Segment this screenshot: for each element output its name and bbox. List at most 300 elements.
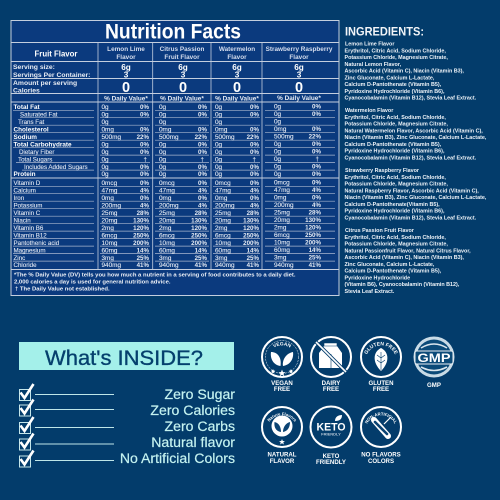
ingredients: lemon lime: Lemon Lime Flavor [345,42,395,48]
banner: What's INSIDE?: What's INSIDE? [45,346,203,370]
ingredients: lemon lime: Erythritol, Citric Acid, Sodium Chloride, [344,48,446,54]
ingredients: lemon lime: Cyanocobalamin (Vitamin B12), Stevia Leaf Extract. [344,96,477,102]
column: strawberry raspberry values: 250% [305,232,321,239]
nutrient labels: Calcium [14,187,36,194]
calories row: 0 [295,80,303,96]
icon: dairy free [311,337,351,393]
column: watermelon values: 0g [215,141,223,148]
serving information: 6g [232,63,242,72]
column: lemon lime values: 0mg [102,195,114,202]
column: lemon lime values: 2mg [102,225,114,232]
column: citrus passion values: 0g [159,111,167,118]
column: strawberry raspberry values: 28% [309,210,321,216]
column: lemon lime values: 0% [140,104,149,111]
ingredients: watermelon: Calcium D-Pantothenate (Vitamin B5), [344,142,442,148]
column: strawberry raspberry values: 10mg [274,240,290,246]
column: watermelon values: 0g [215,156,223,163]
header row: flavors: Fruit Flavor [164,54,200,61]
column: strawberry raspberry values: 0% [312,148,321,156]
column: watermelon values: 0% [250,141,259,148]
daily value headers: % Daily Value* [277,95,321,102]
daily value headers: % Daily Value* [160,96,204,102]
ingredients: lemon lime: Potassium Chloride, Magnesium Citrate, [344,55,448,61]
column: strawberry raspberry values: 0g [274,156,282,163]
nutrient labels: Total Fat [14,104,41,111]
ingredients: strawberry raspberry: Cyanocobalamin (Vitamin B12), Stevia Leaf Extract. [344,215,477,221]
column: citrus passion values: 20mg [159,217,175,224]
column: lemon lime values: 41% [137,262,149,269]
nutrient labels: Zinc [14,255,25,262]
nutrient labels: Saturated Fat [20,111,58,118]
footnote: *The % Daily Value (DV) tells you how much a nutrient in a serving of food contributes to a daily diet. [14,272,296,278]
nutrient labels: Vitamin B6 [14,225,44,232]
column: strawberry raspberry values: 0g [274,164,282,170]
ingredients: watermelon: Natural Watermelon Flavor, Ascorbic Acid (Vitamin C), [344,128,483,134]
column: citrus passion values: 200% [191,240,207,247]
column: watermelon values: 6mcg [215,232,231,239]
column: citrus passion values: 0g [159,164,167,171]
column: strawberry raspberry values: 14% [309,247,321,254]
column: citrus passion values: 0g [159,171,167,178]
nutrient labels: Chloride [14,262,37,269]
column: strawberry raspberry values: 500mg [274,134,294,140]
header row: flavors: Flavor [116,54,136,61]
column: watermelon values: 500mg [215,134,235,141]
footnote [14,272,296,292]
column: lemon lime values: 0% [140,149,149,156]
column: citrus passion values: 47mg [159,187,175,194]
column: lemon lime values: 130% [133,217,149,224]
ingredients: watermelon: Cyanocobalamin (Vitamin B12), Stevia Leaf Extract. [344,155,477,161]
column: strawberry raspberry values: 0% [312,164,321,170]
column: strawberry raspberry values: 20mg [274,217,290,224]
column: watermelon values: 25% [247,255,259,262]
checklist [20,384,235,467]
nutrient labels: Niacin [14,217,31,224]
ingredients: watermelon: Niacin (Vitamin B3), Zinc Gluconate, Calcium L-Lactate, [344,135,487,141]
column: strawberry raspberry values: 940mg [274,262,294,269]
column: strawberry raspberry values: 0% [312,141,321,148]
column: citrus passion values: 28% [195,210,207,217]
column: strawberry raspberry values: 25% [309,254,321,262]
column: strawberry raspberry values: 4% [312,202,321,209]
check item: No Artificial Colors [20,450,235,467]
column: watermelon values: 10mg [215,240,231,247]
ingredients: citrus passion fruit: Potassium Chloride, Magnesium Citrate, [344,242,448,248]
nutrient labels: Magnesium [14,247,45,254]
column: lemon lime values: 0g [102,111,109,118]
column: watermelon values: 0g [215,171,223,178]
column: watermelon values: 25mg [215,210,231,217]
serving information: 3 [124,70,129,80]
nutrient labels: Total Sugars [18,156,52,163]
column: strawberry raspberry values: 0% [312,171,321,178]
column: strawberry raspberry values: 0% [312,180,321,186]
ingredients: strawberry raspberry: Strawberry Raspberry Flavor [345,168,420,174]
ingredients: citrus passion fruit: (Vitamin B6), Cyanocobalamin (Vitamin B12), [344,282,460,288]
column: watermelon values: 940mg [215,262,235,269]
header row: flavors: Flavor [289,54,309,61]
column: strawberry raspberry values: 0g [274,141,282,148]
column: citrus passion values: 0g [159,149,167,156]
column: watermelon values: 41% [247,262,259,269]
serving information [13,63,304,80]
column: citrus passion values: 0% [198,126,207,133]
column: strawberry raspberry values: 3mg [274,254,287,262]
column: strawberry raspberry values: 0g [274,171,282,178]
icon: no flavors colors: NON-ARTIFICIAL [364,412,396,424]
calories row [13,80,303,96]
icon: keto friendly: FRIENDLY [316,459,346,466]
column: strawberry raspberry values: 0mcg [274,180,290,186]
column: strawberry raspberry values: 0% [312,104,321,110]
column: watermelon values: 28% [247,210,259,217]
column: watermelon values: 0% [250,180,259,187]
ingredients: watermelon: Erythritol, Citric Acid, Sodium Chloride, [344,115,446,121]
icon: dairy free: FREE [323,386,339,393]
column: watermelon values: 60mg [215,247,231,254]
column: lemon lime values: 940mg [102,262,121,269]
column: citrus passion values: 2mg [159,225,172,232]
column: lemon lime values: † [144,156,148,163]
column: strawberry raspberry values: 41% [309,262,321,269]
banner: What's INSIDE? [19,342,234,370]
column: citrus passion values: 0% [198,164,207,171]
column: citrus passion values: 250% [191,232,207,239]
column: lemon lime values: 0g [102,164,109,171]
ingredients: lemon lime: Ascorbic Acid (Vitamin C), Niacin (Vitamin B3), [344,68,464,74]
column: watermelon values: † [253,156,257,163]
serving information: 3 [181,70,186,80]
ingredients heading: INGREDIENTS: [345,26,424,38]
column: watermelon values: 0mcg [215,180,231,187]
serving information: 6g [178,63,188,72]
column: citrus passion values: 0g [159,156,167,163]
ingredients: lemon lime: Pyridoxine Hydrochloride (Vitamin B6), [344,89,445,95]
column: citrus passion values: 120% [191,225,207,232]
column: strawberry raspberry values: 0% [312,126,321,133]
column: strawberry raspberry values: 22% [309,134,321,140]
column: citrus passion values: 14% [195,247,207,254]
icon: gluten free [360,336,402,393]
calories row: 0 [233,80,241,96]
ingredients: watermelon: Watermelon Flavor [345,108,394,114]
column: citrus passion values: 0g [159,141,167,148]
footnote: 2,000 calories a day is used for general nutrition advice. [14,280,171,286]
column: lemon lime values: 0% [140,164,149,171]
ingredients: citrus passion fruit: Natural Passionfruit Flavor, Natural Citrus Flavor, [344,248,471,254]
serving information: Servings Per Container: [13,72,90,79]
icon: gluten free: FREE [373,386,389,393]
column: citrus passion values: 0% [198,171,207,178]
column: citrus passion values: 0% [198,141,207,148]
nutrient labels: Cholesterol [14,126,49,133]
column: watermelon values: 0% [250,164,259,171]
icon: GMP seal [414,336,454,389]
column: lemon lime values: 25mg [102,210,118,217]
column: strawberry raspberry values: † [316,156,320,163]
column: watermelon values: 250% [243,232,259,239]
column: watermelon values: 0mg [215,126,228,133]
column: citrus passion values: 6mcg [159,232,175,239]
icon: gluten free: GLUTEN FREE [364,342,398,354]
column: lemon lime values: 28% [137,210,149,217]
column: strawberry raspberry values: 120% [305,224,321,232]
column: watermelon values: 120% [243,225,259,232]
ingredients: lemon lime: Zinc Gluconate, Calcium L-Lactate, [344,75,435,81]
icon: no flavors colors [360,406,402,465]
column: lemon lime values: 0g [102,149,109,156]
ingredients: strawberry raspberry: Calcium D-Pantothenate(Vitamin B5), [344,202,440,208]
nutrient labels: Vitamin B12 [14,232,47,239]
column: strawberry raspberry values: 0mg [274,126,287,133]
column: watermelon values: 22% [247,134,259,141]
footnote: † The Daily Value not established. [15,286,110,292]
column: strawberry raspberry values: 0g [274,118,282,126]
column: strawberry raspberry values: 200% [305,240,321,246]
icon: GMP seal: GMP [418,353,451,365]
nutrient labels: Vitamin C [14,210,41,217]
column: watermelon values: 4% [250,202,259,209]
column: strawberry raspberry values: 25mg [274,210,290,216]
calories row: 0 [179,80,187,96]
column: citrus passion values: 500mg [159,134,179,141]
column: citrus passion values: 25% [195,255,207,262]
column: watermelon values: 0g [215,164,223,171]
ingredients: citrus passion fruit: Erythritol, Citric Acid, Sodium Chloride, [344,235,446,241]
column: citrus passion values: 22% [195,134,207,141]
panel: nutrition facts table [11,20,339,296]
icon: natural flavor: Nature Flavors [267,412,296,422]
column: strawberry raspberry values: 0% [312,194,321,202]
nutrient labels: Pantothenic acid [14,240,60,247]
column: watermelon values: 0g [215,104,223,111]
column: citrus passion values: 0% [198,180,207,187]
ingredients: citrus passion fruit: Stevia Leaf Extract. [344,289,395,295]
ingredients: citrus passion fruit: Citrus Passion Fruit Flavor [345,228,415,234]
column: lemon lime values: 200% [133,240,149,247]
header row: flavors: Lemon Lime [107,46,145,53]
column: citrus passion values [159,104,207,269]
column: lemon lime values: 60mg [102,247,118,254]
column: lemon lime values: 200mg [102,202,121,209]
column: strawberry raspberry values [274,104,321,269]
header row: flavors: Citrus Passion [160,46,204,53]
column: strawberry raspberry values: 130% [305,217,321,224]
ingredients: strawberry raspberry: Niacin (Vitamin B3), Zinc Gluconate, Calcium L-Lactate, [344,195,487,201]
column: watermelon values: 4% [250,187,259,194]
serving information: 3 [235,70,240,80]
column: citrus passion values: 0% [198,104,207,111]
nutrient labels: Total Carbohydrate [14,141,72,148]
icon: vegan free [261,336,303,393]
column: citrus passion values: 4% [198,202,207,209]
column: citrus passion values: 60mg [159,247,175,254]
column: citrus passion values: 10mg [159,240,175,247]
column: lemon lime values: 0% [140,141,149,148]
ingredients: strawberry raspberry: Natural Raspberry Flavor, Ascorbic Acid (Vitamin C), [344,188,479,194]
column: citrus passion values: 0% [198,195,207,202]
icon: vegan free: FREE [274,386,290,393]
column: lemon lime values: 14% [137,247,149,254]
icon: keto friendly [310,406,352,466]
ingredients: citrus passion fruit: Ascorbic Acid (Vitamin C), Niacin (Vitamin B3), [344,255,464,261]
icon: vegan free: VEGAN [271,380,293,387]
icon: GMP seal: GMP [427,382,441,389]
serving information: 3 [297,70,302,80]
column: lemon lime values: 47mg [102,187,118,194]
nutrient labels: Trans Fat [18,119,45,126]
daily value headers: % Daily Value* [104,96,148,102]
check item: Natural flavor [20,434,235,450]
column: watermelon values: 14% [247,247,259,254]
column: citrus passion values: 130% [191,217,207,224]
calories row: Calories [13,88,40,94]
icon: natural flavor: FLAVOR [270,458,295,465]
column: lemon lime values: 0g [102,119,109,126]
ingredients: watermelon: Potassium Chloride, Magnesium Citrate, [344,122,448,128]
column: watermelon values: 0mg [215,195,228,202]
column: lemon lime values: 4% [140,187,149,194]
daily value headers: % Daily Value* [215,96,259,102]
column: citrus passion values: 0% [198,149,207,156]
column: lemon lime values: 6mcg [102,232,118,239]
column: strawberry raspberry values: 4% [312,187,321,194]
column: watermelon values: 0% [250,111,259,118]
icon: gluten free: GLUTEN [368,380,394,387]
column: watermelon values: 0% [250,104,259,111]
column: lemon lime values: 250% [133,232,149,239]
column: citrus passion values: 25mg [159,210,175,217]
header row: flavors [35,46,333,61]
column: strawberry raspberry values: 47mg [274,187,290,194]
ingredients: watermelon: Pyridoxine Hydrochloride (Vitamin B6), [344,148,445,154]
column: watermelon values: 47mg [215,187,231,194]
column: watermelon values: 200mg [215,202,235,209]
column: lemon lime values: 120% [133,225,149,232]
column: lemon lime values: 0% [140,195,149,202]
column: lemon lime values: 0% [140,171,149,178]
column: strawberry raspberry values: 0g [274,111,282,118]
column: watermelon values: 0g [215,111,223,118]
column: watermelon values: 0% [250,126,259,133]
check item: Zero Calories [20,400,235,418]
column: lemon lime values: 22% [137,134,149,141]
ingredients: citrus passion fruit: Calcium D-Pantothenate (Vitamin B5), [344,268,442,274]
ingredients: lemon lime: Natural Lemon Flavor, [344,62,402,68]
column: watermelon values: 0% [250,195,259,202]
nutrient labels: Sodium [14,134,37,141]
ingredients panel [344,26,487,295]
column: citrus passion values: 200mg [159,202,179,209]
header row: flavors: Watermelon [219,46,255,53]
ingredients: strawberry raspberry: Erythritol, Citric Acid, Sodium Chloride, [344,175,446,181]
column: citrus passion values: 940mg [159,262,179,269]
ingredients: citrus passion fruit: Zinc Gluconate, Calcium L-Lactate, [344,262,435,268]
column: strawberry raspberry values: 0mg [274,194,287,202]
column: lemon lime values: 3mg [102,255,114,262]
column: lemon lime values: 0% [140,180,149,187]
ingredients: strawberry raspberry: Potassium Chloride, Magnesium Citrate, [344,182,448,188]
icon: no flavors colors: NO FLAVORS [361,452,401,458]
column: citrus passion values: 0mcg [159,180,175,187]
check item: Zero Calories: Zero Calories [150,402,235,418]
serving information: 6g [294,63,304,72]
icon: natural flavor: NATURAL [268,452,297,458]
column: strawberry raspberry values: 0g [274,148,282,156]
column: citrus passion values: 0g [159,119,167,126]
check item: Zero Sugar: Zero Sugar [164,386,235,402]
column: watermelon values: 3mg [215,255,228,262]
column: watermelon values: 0% [250,171,259,178]
calories row: Amount per serving [13,80,77,87]
column: citrus passion values: † [201,156,205,163]
daily value headers [104,95,321,102]
column: citrus passion values: 0mg [159,195,172,202]
column: lemon lime values: 0% [140,126,149,133]
column: lemon lime values: 10mg [102,240,118,247]
serving information: 6g [121,63,131,72]
ingredients: lemon lime: Calcium D-Pantothenate (Vitamin B5), [344,82,442,88]
column: citrus passion values: 41% [195,262,207,269]
title: Nutrition Facts [105,20,241,44]
column: strawberry raspberry values: 200mg [274,202,294,209]
column: lemon lime values: 0mg [102,126,114,133]
column: lemon lime values: 0% [140,111,149,118]
column: watermelon values: 2mg [215,225,228,232]
column: citrus passion values: 3mg [159,255,172,262]
header row: flavors: Flavor [227,54,247,61]
header row: flavors: Strawberry Raspberry [266,46,333,53]
icon: keto friendly: KETO [323,453,340,460]
column: watermelon values: 0g [215,119,223,126]
column: watermelon values: 130% [243,217,259,224]
serving information: Serving size: [13,64,55,71]
header row: flavors: Fruit Flavor [35,50,77,58]
icon: no flavors colors: COLORS [368,458,394,465]
nutrient labels: Iron [14,195,25,202]
check item: Zero Carbs [20,417,235,434]
column: lemon lime values: 20mg [102,217,118,224]
calories row: 0 [122,80,130,96]
column: strawberry raspberry values: 0% [312,111,321,118]
nutrient labels: Potassium [14,202,42,209]
column: lemon lime values [102,104,149,269]
nutrient labels: Includes Added Sugars [24,164,88,171]
ingredients: strawberry raspberry: Pyridoxine Hydrochloride (Vitamin B6), [344,208,445,214]
column: lemon lime values: 500mg [102,134,121,141]
icon: dairy free: DAIRY [322,380,340,387]
icon: natural flavor [261,406,303,465]
column: strawberry raspberry values: 2mg [274,224,287,232]
column: watermelon values: 0g [215,149,223,156]
nutrient labels: Vitamin D [14,180,41,187]
check item: No Artificial Colors: No Artificial Colors [120,450,235,466]
column: lemon lime values: 0mcg [102,180,118,187]
column: lemon lime values: 0g [102,156,109,163]
column: lemon lime values: 25% [137,255,149,262]
column: lemon lime values: 0g [102,104,109,111]
column: strawberry raspberry values: 60mg [274,247,290,254]
check item: Natural flavor: Natural flavor [151,434,235,450]
column: lemon lime values: 0g [102,141,109,148]
column: watermelon values: 20mg [215,217,231,224]
column: watermelon values [215,104,259,269]
column: citrus passion values: 0% [198,111,207,118]
column: lemon lime values: 0g [102,171,109,178]
column: strawberry raspberry values: 0g [274,104,282,110]
icon: keto friendly: KETO [316,422,346,434]
